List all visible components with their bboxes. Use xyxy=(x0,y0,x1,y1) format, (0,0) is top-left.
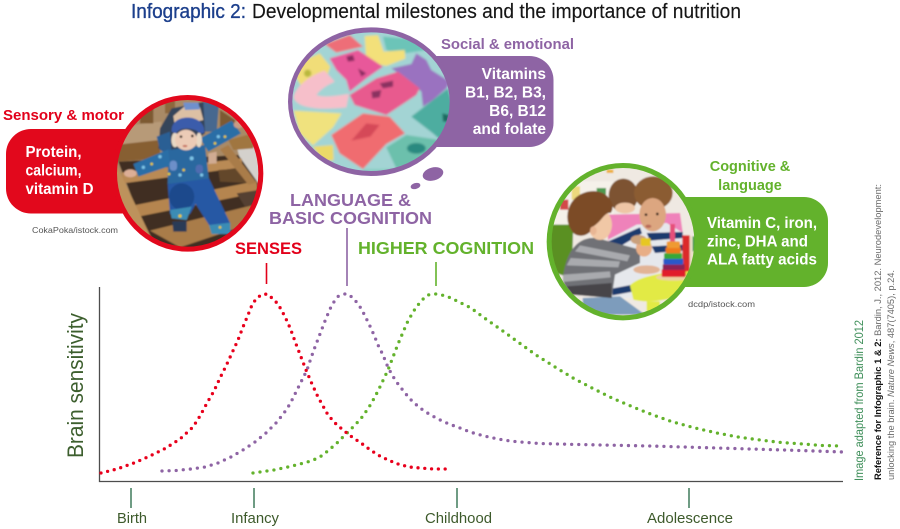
curve heading: language and basic cognition: BASIC COGNITION xyxy=(269,208,432,228)
nutrient box: social and emotional: Vitamins xyxy=(482,66,546,83)
nutrient box: social and emotional xyxy=(400,56,554,147)
nutrient box: cognitive and language: zinc, DHA and xyxy=(707,234,808,250)
curve heading: language and basic cognition: LANGUAGE & xyxy=(290,190,411,210)
nutrient box: sensory and motor: calcium, xyxy=(26,162,82,180)
curve heading: language and basic cognition xyxy=(269,190,432,228)
heading: sensory and motor: Sensory & motor xyxy=(3,108,124,124)
panel: sensory and motor xyxy=(3,90,272,257)
photo: children playing at table xyxy=(546,163,694,320)
nutrient box: cognitive and language xyxy=(660,197,828,287)
green curve: higher cognition xyxy=(253,294,842,473)
red curve: senses xyxy=(101,294,447,473)
time ticks xyxy=(131,488,689,508)
marker line: higher cognition xyxy=(435,262,437,286)
chart: brain sensitivity curves xyxy=(63,287,843,527)
time labels: Birth xyxy=(117,510,147,527)
title: Infographic 2: xyxy=(131,1,246,23)
panel: cognitive and language xyxy=(540,158,828,325)
panel: social and emotional xyxy=(283,20,574,190)
nutrient box: social and emotional: B6, B12 xyxy=(489,103,546,120)
nutrient box: sensory and motor xyxy=(6,129,156,214)
purple curve: language and basic cognition xyxy=(162,294,843,471)
photo: toddler on wooden steps xyxy=(117,95,264,252)
nutrient box: social and emotional: B1, B2, B3, xyxy=(465,84,546,102)
photo credit: CokaPoka: CokaPoka/istock.com xyxy=(32,225,118,235)
nutrient box: cognitive and language: Vitamin C, iron, xyxy=(707,215,817,232)
heading: cognitive and language: Cognitive & xyxy=(710,159,791,175)
curve heading: senses: SENSES xyxy=(235,239,302,258)
marker line: language xyxy=(346,228,348,286)
thought bubble large xyxy=(421,165,445,183)
heading: social and emotional: Social & emotional xyxy=(441,37,574,53)
reference note: unlocking the brain. Nature News, 487(7405), p.24. xyxy=(886,270,896,480)
photo credit: dcdp: dcdp/istock.com xyxy=(688,299,755,309)
photo: wooden alphabet letters xyxy=(288,27,450,176)
nutrient box: cognitive and language: ALA fatty acids xyxy=(707,252,817,268)
nutrient box: social and emotional: and folate xyxy=(473,121,546,138)
chart axes xyxy=(100,287,843,482)
time labels: Infancy xyxy=(231,510,279,527)
thought bubble small xyxy=(410,182,421,190)
reference note: Reference for Infographic 1 & 2: Bardin, J., 2012. Neurodevelopment: xyxy=(873,184,883,480)
heading: cognitive and language: language xyxy=(718,178,782,194)
image source note: Image adapted from Bardin 2012 xyxy=(852,320,866,481)
y axis label: Brain sensitivity xyxy=(63,313,88,458)
reference note xyxy=(873,184,896,480)
nutrient box: sensory and motor: vitamin D xyxy=(26,181,94,198)
heading: cognitive and language xyxy=(710,159,791,194)
title: Developmental milestones and the importance of nutrition xyxy=(252,1,741,23)
time labels: Adolescence xyxy=(647,510,733,527)
time labels: Childhood xyxy=(425,510,492,527)
nutrient box: sensory and motor: Protein, xyxy=(26,144,82,161)
curve heading: higher cognition: HIGHER COGNITION xyxy=(358,238,534,258)
marker line: senses xyxy=(266,263,268,284)
time labels xyxy=(117,510,733,527)
